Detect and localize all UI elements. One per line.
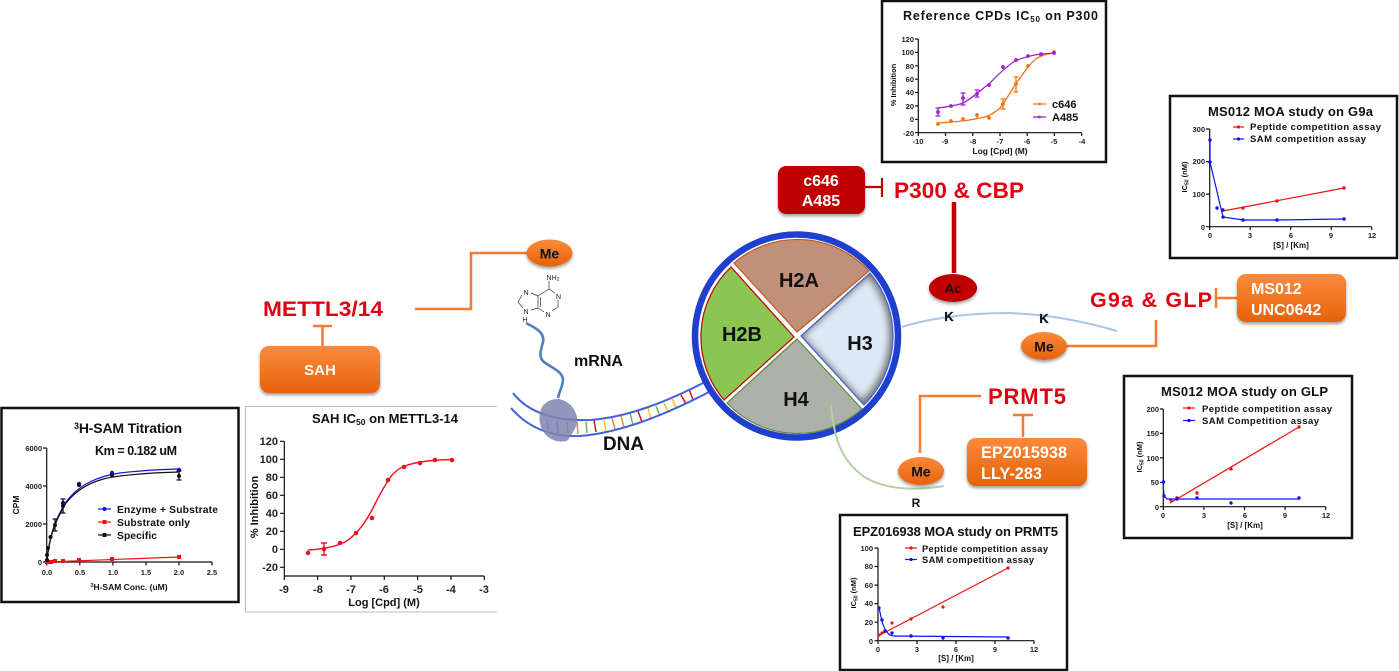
adenine structure: N bbox=[556, 294, 561, 301]
nucleosome circle bbox=[695, 234, 898, 438]
adenine structure: 2 bbox=[557, 277, 560, 283]
adenine structure: N bbox=[545, 312, 551, 319]
wedge H4 bbox=[727, 339, 862, 433]
axes: [S] / [Km] bbox=[1227, 521, 1263, 530]
wedge H4: H4 bbox=[783, 389, 810, 411]
axes: H-SAM Conc. (uM) bbox=[93, 582, 168, 592]
inhibition bar PRMT5 bbox=[1013, 415, 1033, 437]
axes: IC bbox=[1135, 465, 1144, 472]
heading G9a & GLP: G9a & GLP bbox=[1090, 288, 1212, 312]
legend bbox=[98, 505, 218, 542]
chart title: H-SAM Titration bbox=[79, 420, 182, 436]
axes: 0 bbox=[1155, 503, 1159, 512]
axes: 200 bbox=[1192, 157, 1205, 166]
axes: 6 bbox=[954, 645, 958, 654]
axes: 40 bbox=[266, 508, 278, 520]
axes: 120 bbox=[260, 436, 278, 448]
Ac badge: Ac bbox=[945, 281, 961, 296]
axes: -10 bbox=[913, 137, 923, 146]
axes: 20 bbox=[865, 618, 873, 627]
axes: 9 bbox=[1283, 511, 1287, 520]
axes: 6 bbox=[1289, 231, 1293, 240]
axes: -8 bbox=[970, 137, 976, 146]
chart title: SAH IC bbox=[312, 411, 356, 426]
chart title: MS012 MOA study on G9a bbox=[1208, 104, 1374, 119]
panel: SAH IC50 on METTL3-14 chart bbox=[246, 406, 497, 612]
inhibitor box c646 A485: A485 bbox=[802, 193, 840, 210]
chart title: MS012 MOA study on GLP bbox=[1161, 384, 1328, 399]
wedge H3 bbox=[801, 273, 893, 405]
legend bbox=[1183, 404, 1333, 427]
axes bbox=[11, 444, 217, 592]
series specific bbox=[45, 471, 182, 562]
axes: 0 bbox=[1201, 223, 1205, 232]
axes: % Inhibition bbox=[889, 63, 898, 106]
adenine structure: N bbox=[523, 309, 529, 316]
Me badge H4: Me bbox=[911, 464, 931, 480]
legend: Specific bbox=[117, 531, 157, 542]
axes: 12 bbox=[1030, 645, 1038, 654]
panel: MS012 MOA on G9a chart bbox=[1170, 96, 1397, 258]
axes: (nM) bbox=[1135, 441, 1144, 459]
axes: 2.0 bbox=[174, 568, 184, 577]
axes: 3 bbox=[1248, 231, 1252, 240]
axes: [S] / [Km] bbox=[938, 654, 974, 663]
axes: 100 bbox=[260, 454, 278, 466]
axes: Log [Cpd] (M) bbox=[972, 146, 1028, 156]
inhibitor box SAH bbox=[260, 346, 380, 393]
axes: 1.5 bbox=[141, 568, 151, 577]
Me badge H4 bbox=[898, 457, 944, 485]
heading PRMT5: PRMT5 bbox=[988, 384, 1066, 409]
panel: 3H-SAM titration chart bbox=[2, 408, 238, 602]
axes: 3 bbox=[1202, 511, 1206, 520]
axes: 0 bbox=[876, 645, 880, 654]
axes: 80 bbox=[266, 472, 278, 484]
axes: -20 bbox=[262, 562, 278, 574]
legend bbox=[1033, 99, 1078, 124]
wedge H2A bbox=[734, 239, 869, 332]
chart title: on P300 bbox=[1041, 9, 1098, 23]
axes: -6 bbox=[1024, 137, 1030, 146]
axes: -8 bbox=[313, 584, 323, 596]
axes: 20 bbox=[906, 102, 914, 111]
legend bbox=[1233, 122, 1382, 145]
wedge H2B bbox=[701, 267, 794, 400]
series enzyme plus substrate bbox=[47, 468, 181, 562]
PRMT5 connector bbox=[920, 396, 981, 453]
adenine structure: H bbox=[522, 317, 528, 324]
axes: 50 bbox=[854, 595, 860, 601]
axes: -4 bbox=[446, 584, 457, 596]
inhibitor box MS012 UNC0642 bbox=[1237, 274, 1346, 322]
inhibitor box c646 A485: c646 bbox=[803, 173, 839, 190]
inhibitor box MS012 UNC0642: UNC0642 bbox=[1251, 302, 1321, 319]
G9a connector bbox=[1067, 320, 1156, 346]
axes: 60 bbox=[266, 490, 278, 502]
axes: 60 bbox=[906, 75, 914, 84]
axes: 12 bbox=[1322, 511, 1330, 520]
axes: 2000 bbox=[25, 520, 42, 529]
panel: EPZ015938 MOA on PRMT5 chart bbox=[840, 515, 1067, 670]
axes: 0.0 bbox=[42, 568, 52, 577]
axes bbox=[249, 436, 489, 609]
axes: 3 bbox=[915, 645, 919, 654]
axes: IC bbox=[849, 601, 858, 608]
Me badge mRNA bbox=[526, 240, 572, 266]
adenine structure: N bbox=[523, 290, 529, 297]
axes: -7 bbox=[346, 584, 356, 596]
inhibitor box MS012 UNC0642: MS012 bbox=[1251, 281, 1302, 298]
Me badge mRNA: Me bbox=[540, 246, 559, 262]
inhibition bar G9a bbox=[1216, 288, 1237, 308]
chart title: 50 bbox=[1030, 15, 1041, 24]
Km value: Km = 0.182 uM bbox=[95, 444, 177, 458]
axes: 20 bbox=[266, 526, 278, 538]
axes: 100 bbox=[1192, 190, 1205, 199]
axes: 80 bbox=[906, 62, 914, 71]
series SAM bbox=[1162, 480, 1301, 505]
axes: (nM) bbox=[1180, 161, 1189, 179]
inhibition bar SAH bbox=[313, 326, 332, 346]
residue R: R bbox=[912, 496, 921, 510]
residue K: K bbox=[944, 309, 954, 324]
axes: [S] / [Km] bbox=[1273, 241, 1309, 250]
label: mRNA: mRNA bbox=[574, 353, 623, 370]
axes: 12 bbox=[1368, 231, 1376, 240]
axes: 6000 bbox=[25, 444, 42, 453]
axes: 0.5 bbox=[75, 568, 85, 577]
axes: 4000 bbox=[25, 482, 42, 491]
axes bbox=[889, 35, 1086, 156]
inhibitor box EPZ015938 LLY-283: EPZ015938 bbox=[981, 444, 1067, 462]
axes: -20 bbox=[903, 129, 914, 138]
legend: Peptide competition assay bbox=[1202, 404, 1333, 415]
polymerase blob bbox=[540, 399, 577, 442]
axes: 0 bbox=[272, 544, 278, 556]
H3 tail bbox=[902, 313, 1117, 331]
axes: CPM bbox=[11, 496, 21, 514]
axes bbox=[1135, 405, 1330, 530]
axes: % Inhibition bbox=[249, 476, 261, 538]
series SAM bbox=[877, 606, 1010, 640]
axes: 40 bbox=[906, 88, 914, 97]
axes: (nM) bbox=[849, 577, 858, 595]
inhibition bar P300 bbox=[865, 178, 882, 197]
axes: 2.5 bbox=[207, 568, 217, 577]
axes: 50 bbox=[1140, 459, 1146, 465]
axes: 50 bbox=[1151, 478, 1159, 487]
chart title: 50 bbox=[356, 417, 366, 427]
legend: Enzyme + Substrate bbox=[117, 505, 218, 516]
METTL connector bbox=[415, 253, 527, 309]
axes: -9 bbox=[279, 584, 289, 596]
legend: Substrate only bbox=[117, 518, 190, 529]
axes: -5 bbox=[1051, 137, 1057, 146]
chart title: 3 bbox=[74, 421, 79, 431]
DNA double helix bbox=[511, 382, 709, 436]
axes: 0 bbox=[1208, 231, 1212, 240]
axes: 120 bbox=[901, 35, 914, 44]
axes: 0 bbox=[910, 115, 914, 124]
axes: IC bbox=[1180, 185, 1189, 192]
axes: 0 bbox=[38, 558, 42, 567]
adenine structure bbox=[518, 275, 561, 324]
axes: 6 bbox=[1243, 511, 1247, 520]
axes: 50 bbox=[1184, 179, 1190, 185]
heading METTL3/14: METTL3/14 bbox=[263, 298, 383, 321]
legend: Peptide competition assay bbox=[1250, 122, 1382, 133]
axes bbox=[1180, 125, 1376, 250]
Ac badge bbox=[929, 274, 977, 302]
wedge H2B: H2B bbox=[722, 324, 762, 346]
series SAH bbox=[306, 458, 454, 555]
series c646 bbox=[937, 51, 1055, 125]
wedge H2A: H2A bbox=[779, 270, 819, 292]
axes: 300 bbox=[1192, 125, 1205, 134]
chart title: on METTL3-14 bbox=[366, 411, 459, 426]
chart title: Reference CPDs IC bbox=[903, 9, 1029, 23]
panel: P300 reference compounds chart bbox=[882, 1, 1106, 162]
series A485 bbox=[936, 52, 1055, 116]
axes: -3 bbox=[479, 584, 489, 596]
residue K: K bbox=[1039, 311, 1049, 326]
inhibitor box EPZ015938 LLY-283 bbox=[967, 438, 1087, 486]
legend: c646 bbox=[1052, 99, 1076, 111]
axes: 1.0 bbox=[108, 568, 118, 577]
legend bbox=[905, 544, 1049, 565]
axes: -5 bbox=[413, 584, 423, 596]
axes: -9 bbox=[942, 137, 948, 146]
axes: -6 bbox=[379, 584, 389, 596]
panel: MS012 MOA on GLP chart bbox=[1124, 376, 1352, 538]
axes bbox=[849, 544, 1038, 663]
axes: -4 bbox=[1079, 137, 1086, 146]
legend: A485 bbox=[1052, 112, 1078, 124]
series SAM bbox=[1208, 138, 1346, 222]
chart title: EPZ016938 MOA study on PRMT5 bbox=[853, 524, 1058, 539]
Me badge H3: Me bbox=[1034, 338, 1054, 354]
axes: 100 bbox=[860, 544, 873, 553]
series peptide bbox=[1169, 425, 1301, 503]
axes: Log [Cpd] (M) bbox=[348, 597, 420, 609]
axes: 9 bbox=[1329, 231, 1333, 240]
axes: 0 bbox=[1161, 511, 1165, 520]
H4 tail bbox=[831, 405, 944, 489]
axes: 9 bbox=[993, 645, 997, 654]
axes: 40 bbox=[865, 599, 873, 608]
inhibitor box SAH: SAH bbox=[304, 362, 336, 379]
axes: 3 bbox=[90, 583, 93, 589]
P300 connector bbox=[952, 202, 956, 273]
axes: 0 bbox=[869, 637, 873, 646]
Me badge H3 bbox=[1021, 332, 1067, 360]
wedge H3: H3 bbox=[847, 333, 873, 355]
legend: SAM Competition assay bbox=[1202, 416, 1320, 427]
inhibitor box EPZ015938 LLY-283: LLY-283 bbox=[981, 465, 1042, 483]
adenine structure: NH bbox=[547, 275, 557, 282]
mRNA strand bbox=[526, 323, 563, 398]
series peptide bbox=[877, 566, 1010, 637]
axes: 60 bbox=[865, 581, 873, 590]
legend: SAM competition assay bbox=[922, 555, 1035, 565]
series peptide bbox=[1223, 186, 1346, 211]
axes: 100 bbox=[1146, 454, 1159, 463]
axes: 200 bbox=[1146, 405, 1159, 414]
axes: 100 bbox=[901, 48, 914, 57]
label: DNA: DNA bbox=[603, 434, 644, 455]
inhibitor box c646 A485 bbox=[778, 166, 865, 214]
series substrate only bbox=[45, 555, 181, 564]
axes: 150 bbox=[1146, 429, 1159, 438]
legend: Peptide competition assay bbox=[922, 544, 1049, 554]
axes: 80 bbox=[865, 562, 873, 571]
heading P300 & CBP: P300 & CBP bbox=[894, 178, 1024, 203]
axes: -7 bbox=[997, 137, 1003, 146]
legend: SAM competition assay bbox=[1250, 134, 1367, 145]
